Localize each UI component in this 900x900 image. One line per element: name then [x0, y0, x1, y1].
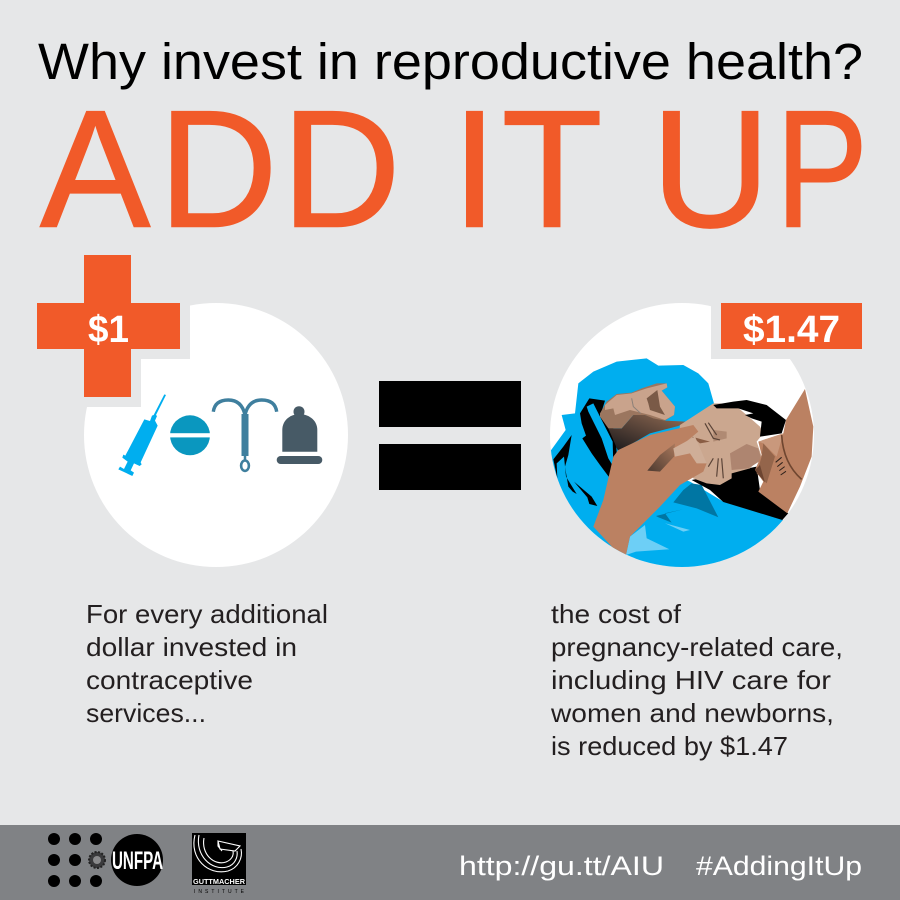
text: cost reduced: pregnancy-related care,	[551, 632, 843, 662]
cross halo	[74, 245, 190, 407]
text: every additional dollar: services...	[86, 698, 206, 728]
dark cloth fold	[673, 483, 718, 517]
text: cost reduced	[550, 599, 843, 761]
white circle	[84, 303, 348, 567]
icon: iud	[213, 400, 277, 471]
headline: add it up: I	[452, 77, 497, 263]
equals sign	[379, 381, 521, 490]
title: Why invest in reproductive health?	[38, 33, 863, 90]
text: cost reduced: is reduced by $1.47	[551, 731, 788, 761]
plus sign with price	[37, 255, 180, 397]
black shadow under baby	[692, 467, 788, 520]
mother face and neck	[755, 389, 813, 513]
baby hair	[713, 400, 786, 437]
logo: unfpa	[48, 833, 163, 887]
photo circle: mother and newborn	[550, 303, 817, 573]
headline: add it up: T	[502, 77, 603, 263]
baby arm	[600, 383, 687, 452]
logo: guttmacher institute: INSTITUTE	[194, 889, 245, 895]
price label	[721, 303, 862, 351]
headline: add it up: D	[281, 77, 401, 263]
headline: add it up: A	[40, 77, 150, 263]
text: every additional dollar	[86, 599, 328, 728]
headline: add it up	[40, 75, 868, 263]
light cloth fold	[626, 525, 669, 555]
panel: contraceptive services	[37, 245, 348, 728]
plus sign with price: $1	[88, 309, 129, 351]
price label: $1.47	[743, 309, 840, 351]
mother hand	[593, 425, 707, 555]
headline: add it up: P	[776, 75, 868, 262]
text: cost reduced: including HIV care for	[551, 665, 831, 695]
logo: guttmacher institute	[192, 833, 246, 895]
headline: add it up: D	[158, 77, 278, 263]
blue cloth	[551, 358, 783, 567]
logo: unfpa: UNFPA	[112, 847, 163, 875]
price cut-out	[711, 293, 872, 359]
text: every additional dollar: For every additional	[86, 599, 328, 629]
text: cost reduced: women and newborns,	[550, 698, 834, 728]
headline: add it up: U	[651, 77, 770, 263]
icon: condom	[277, 406, 322, 464]
hashtag: #AddingItUp	[696, 851, 862, 881]
baby face	[677, 403, 763, 485]
text: cost reduced: the cost of	[551, 599, 682, 629]
icon: pill	[169, 415, 211, 455]
logo: guttmacher institute: GUTTMACHER	[193, 877, 245, 886]
text: every additional dollar: dollar invested in	[86, 632, 297, 662]
panel: pregnancy-related care	[550, 293, 872, 761]
black cloth shadows	[580, 398, 617, 480]
text: every additional dollar: contraceptive	[86, 665, 253, 695]
icon: syringe	[118, 394, 166, 476]
footer bar	[0, 825, 900, 900]
link: http://gu.tt/AIU	[459, 851, 664, 881]
